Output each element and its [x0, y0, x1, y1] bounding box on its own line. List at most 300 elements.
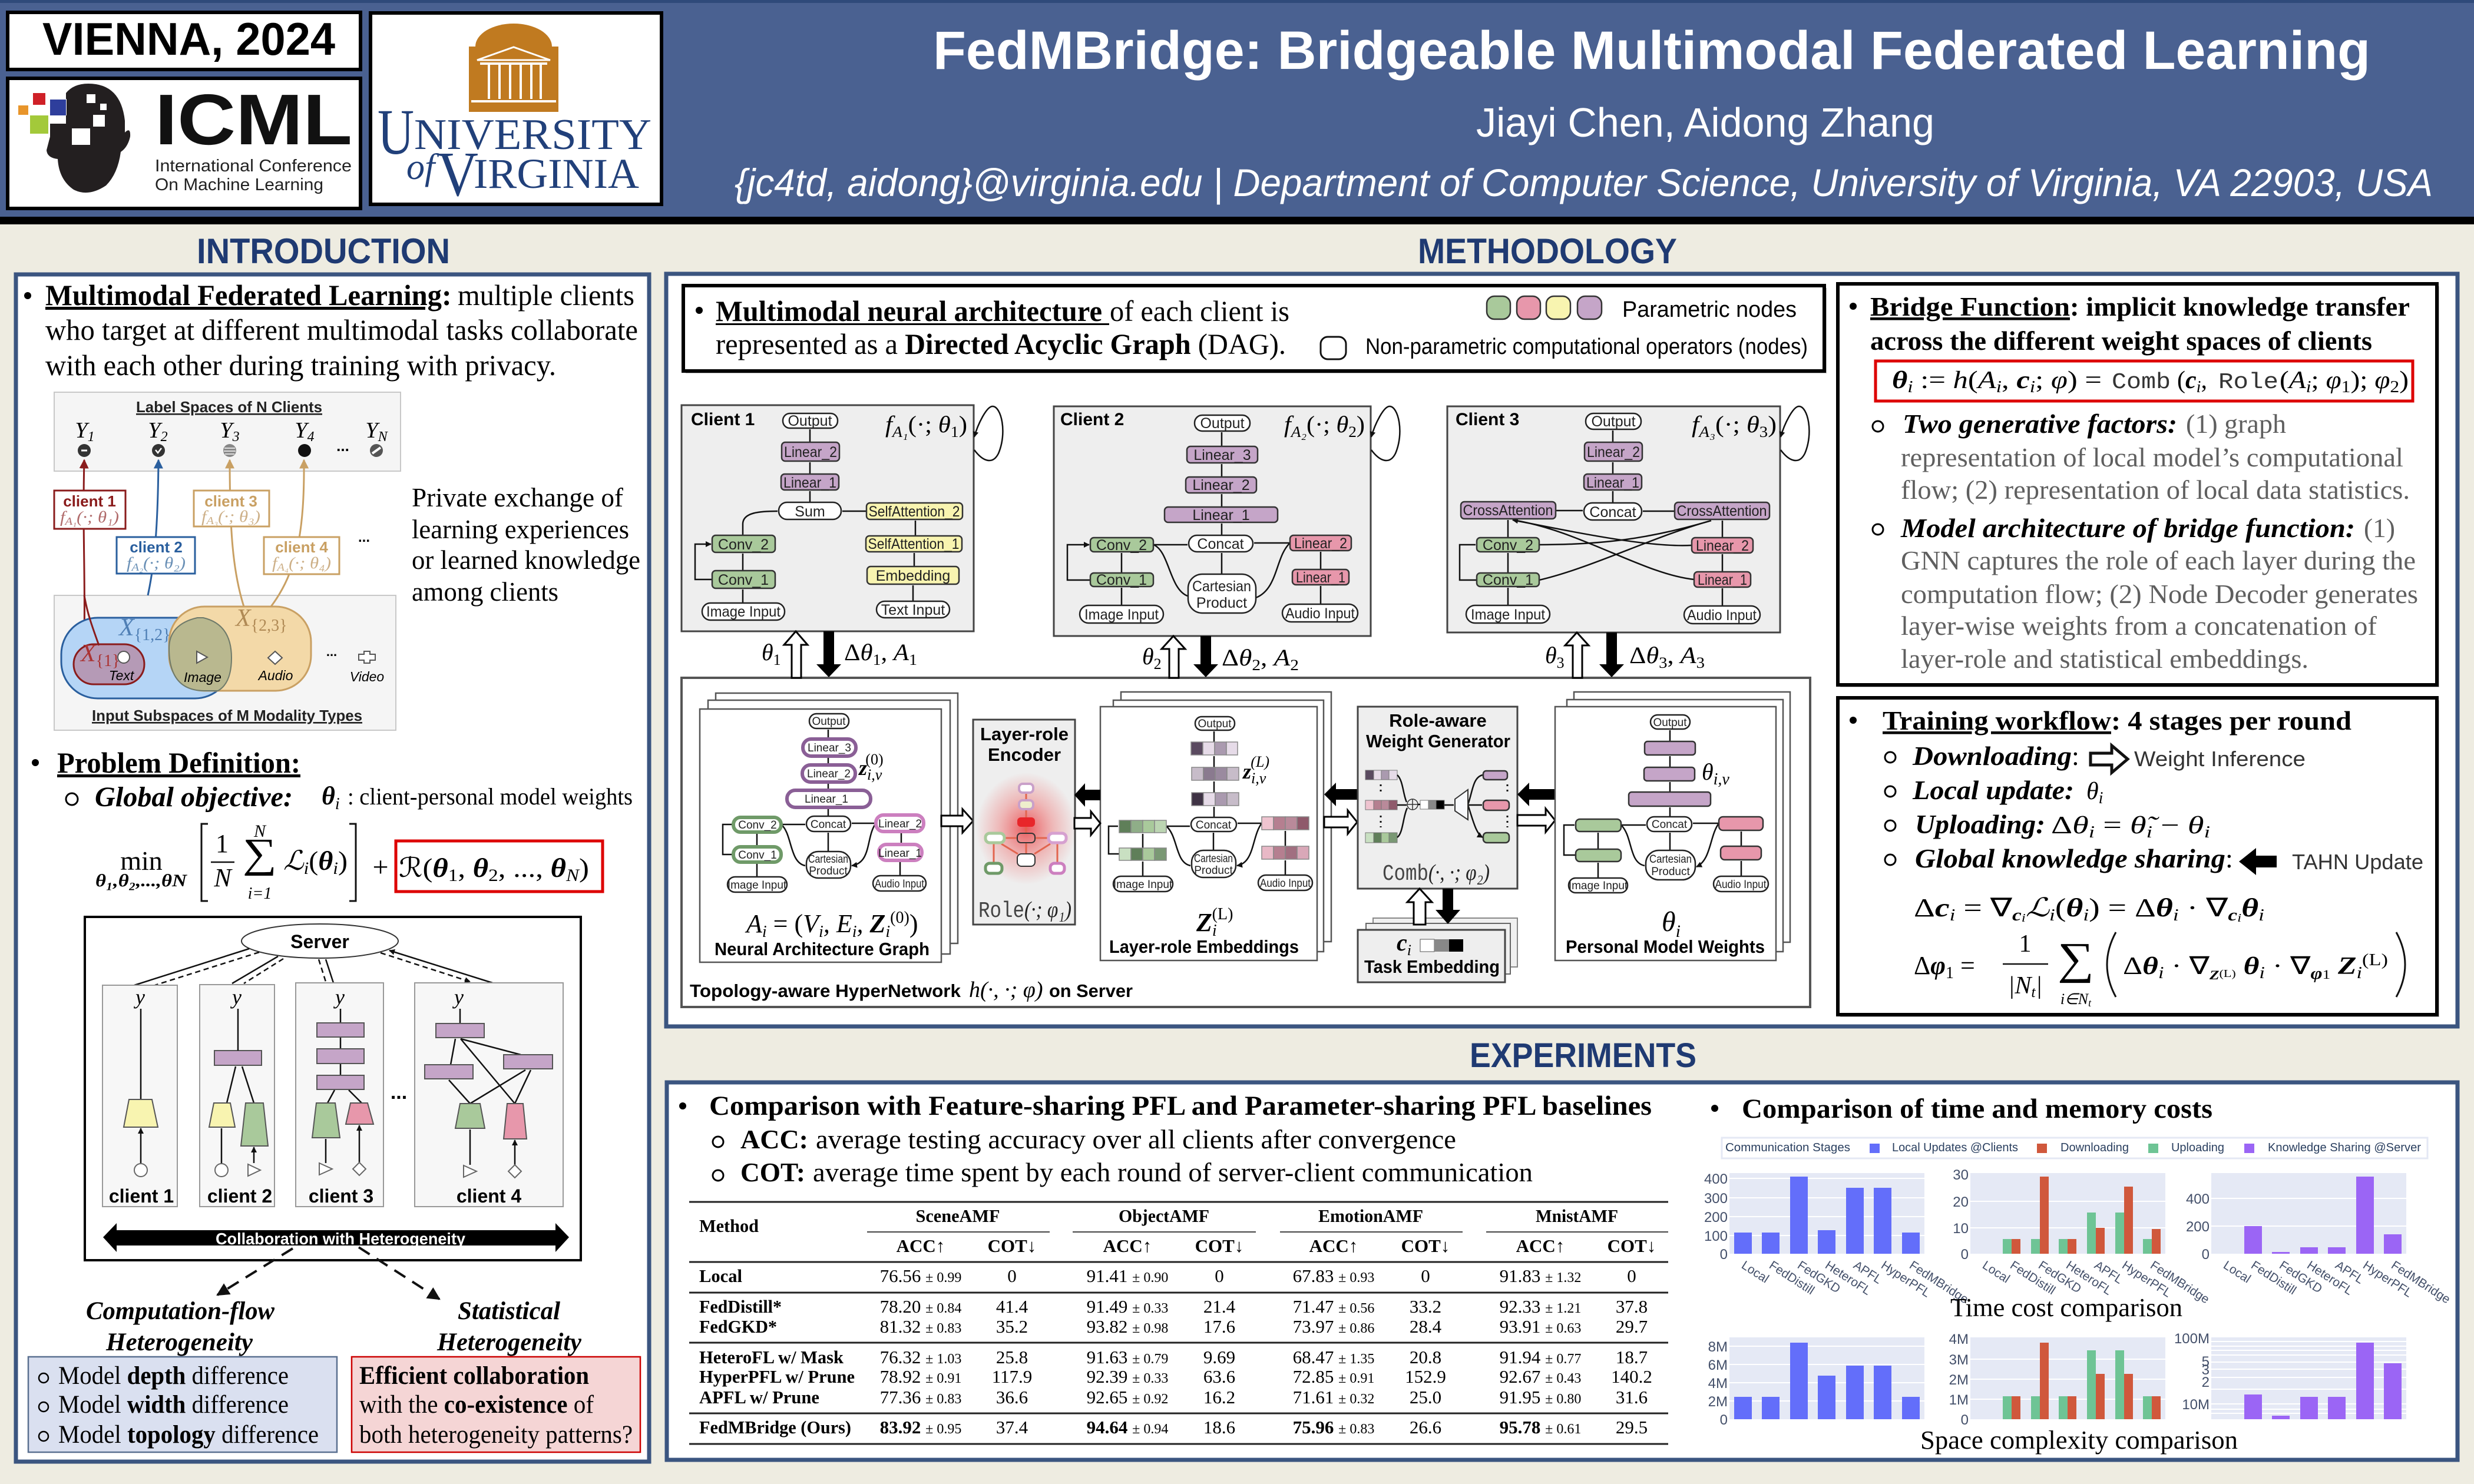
- formula: global objective: i=1: [248, 885, 272, 903]
- chart: space, knowledge sharing: [2174, 1331, 2406, 1419]
- chart: space, uploading and downloading: [1949, 1331, 2165, 1428]
- stage: local update: [1885, 775, 2103, 807]
- arrows: client 2 to hypernetwork: θ: [1142, 643, 1154, 670]
- panel: methodology: [666, 274, 2458, 1026]
- formula: bridge function: i: [2197, 378, 2201, 396]
- text: heterogeneity types: Heterogeneity: [436, 1329, 582, 1356]
- text: problem definition: i: [335, 795, 340, 813]
- stack: neural architecture graph: ,: [856, 909, 869, 938]
- stack: layer-role embeddings: (L): [1251, 753, 1269, 770]
- stack: layer-role embeddings: i: [1212, 922, 1217, 940]
- row: feddistill: 41.4: [996, 1296, 1028, 1317]
- diagram: client 3: 3: [1759, 423, 1768, 440]
- stack: personal model weights: i: [1676, 922, 1681, 941]
- diagram: client 3: θ: [1746, 411, 1758, 438]
- panel: layer-role encoder: [973, 720, 1076, 925]
- diagram: client 2: Client 2: [1060, 410, 1124, 429]
- row: local: 67.83 ± 0.93: [1293, 1266, 1374, 1286]
- text: baselines comparison: average time spent by each round of server-client communication: [813, 1158, 1533, 1187]
- chart: time, knowledge sharing: HyperPFL: [2360, 1258, 2415, 1300]
- text: private exchange: [412, 482, 640, 607]
- stage: uploading: i: [2089, 823, 2095, 842]
- diagram: label spaces and input subspaces: A₂: [131, 561, 143, 573]
- box: research question: with the co-existence of: [359, 1391, 594, 1419]
- diagram: label spaces and input subspaces: Audio: [257, 668, 293, 683]
- client 4: client 4: [457, 1185, 521, 1207]
- stack: personal model weights: Personal Model Weights: [1566, 936, 1765, 957]
- diagram: label spaces and input subspaces: f: [60, 508, 65, 526]
- arrow: collaboration with heterogeneity: [103, 1223, 569, 1252]
- diagram: client 3: Conv_2: [1483, 537, 1533, 554]
- text: baselines comparison: COT:: [740, 1158, 805, 1187]
- row: local: 0: [1215, 1266, 1224, 1286]
- diagram: client 3: Output: [1591, 413, 1636, 430]
- heading: methodology: METHODOLOGY: [1418, 231, 1677, 271]
- formula: bridge function: 1: [2341, 378, 2350, 396]
- diagram: label spaces and input subspaces: {1}: [96, 652, 120, 670]
- stage: global knowledge sharing: :: [2225, 843, 2233, 873]
- row: feddistill: 71.47 ± 0.56: [1293, 1296, 1374, 1317]
- formula: global objective: i: [304, 859, 309, 878]
- table: results: ObjectAMF: [1119, 1205, 1209, 1226]
- logo: University of Virginia: of: [406, 147, 439, 187]
- diagram: client 1: Sum: [795, 504, 825, 520]
- diagram: client 1: A₁: [891, 423, 908, 440]
- diagram: client 1: Linear_1: [783, 475, 836, 491]
- diagram: client 1: Image Input: [706, 604, 780, 620]
- formula: encoder gradient: i: [2259, 964, 2265, 982]
- stack: personal model weights: θ: [1702, 758, 1714, 785]
- arrow: embeddings to encoder: [1074, 783, 1100, 807]
- arrows: client 2 to hypernetwork: A: [1272, 644, 1291, 671]
- formula: encoder gradient: i: [2158, 964, 2164, 982]
- stack: neural architecture graph: Linear_2: [807, 768, 851, 780]
- stack: task embedding: i: [1407, 942, 1411, 959]
- text: private exchange: among clients: [412, 577, 558, 607]
- diagram: client 2: θ: [1336, 411, 1348, 438]
- box: neural architecture definition: Multimodal neural architecture: [716, 294, 1102, 327]
- row: local: 91.83 ± 1.32: [1500, 1266, 1581, 1286]
- diagram: label spaces and input subspaces: {2,3}: [251, 617, 287, 635]
- legend: node types: Parametric nodes: [1622, 297, 1797, 322]
- row: hyperpfl: 72.85 ± 0.91: [1293, 1366, 1374, 1387]
- arrows: client 1 to hypernetwork: A: [892, 639, 909, 665]
- row: apfl: 71.61 ± 0.32: [1293, 1387, 1374, 1407]
- formula: bridge function: Comb: [2112, 370, 2171, 395]
- legend: communication stages: Downloading: [2060, 1141, 2129, 1154]
- chart: time, uploading and downloading: 10: [1953, 1221, 1969, 1237]
- formula: bridge function: i: [2030, 378, 2035, 396]
- diagram: server and client architectures: [85, 917, 581, 1260]
- row: fedgkd: 81.32 ± 0.83: [880, 1316, 961, 1337]
- diagram: client 3: CrossAttention: [1463, 502, 1553, 519]
- stack: layer-role embeddings: i,v: [1251, 770, 1266, 787]
- diagram: client 3: f: [1692, 411, 1698, 438]
- arrows: client 2 to hypernetwork: 2: [1252, 657, 1261, 674]
- formula: encoder gradient: 1: [2323, 967, 2330, 982]
- formula: encoder gradient: t: [2088, 997, 2092, 1009]
- diagram: client 2: A₂: [1290, 423, 1307, 440]
- stage: local update: i: [2099, 789, 2103, 807]
- text: model architecture of bridge function: GNN captures the role of each layer during the: [1901, 545, 2416, 575]
- formula: global objective: θ: [551, 853, 566, 883]
- chart: space, knowledge sharing: 10M: [2182, 1397, 2210, 1413]
- row: fedmbridge: [880, 1417, 1648, 1437]
- formula: global objective: [95, 822, 603, 903]
- formula: task embedding gradient: i: [2083, 906, 2089, 925]
- formula: bridge function: ;: [2311, 367, 2326, 394]
- stack: personal model weights: Concat: [1652, 819, 1688, 831]
- stack: personal model weights: θ: [1662, 906, 1676, 938]
- formula: task embedding gradient: i: [2049, 906, 2055, 925]
- stack: layer-role embeddings: Image Input: [1113, 879, 1173, 891]
- formula: global objective: 2: [488, 866, 498, 885]
- stack: neural architecture graph: Audio Input: [875, 878, 925, 890]
- arrows: client 1 to hypernetwork: Δθ: [844, 639, 872, 665]
- arrow: to statistical heterogeneity: [359, 1247, 439, 1299]
- diagram: client 3: [1447, 406, 1809, 632]
- legend: node types: Non-parametric computational operators (nodes): [1365, 334, 1808, 359]
- stack: neural architecture graph: A: [746, 909, 762, 938]
- row: apfl: 25.0: [1410, 1387, 1441, 1407]
- formula: encoder gradient: · ∇: [2164, 953, 2210, 980]
- legend: communication stages: [1722, 1138, 2427, 1158]
- chart: time, local updates: 200: [1704, 1210, 1728, 1225]
- text: multimodal federated learning: Multimodal Federated Learning: [45, 279, 442, 312]
- chart: time, knowledge sharing: 0: [2202, 1247, 2210, 1263]
- row: local: 0: [1421, 1266, 1430, 1286]
- diagram: client 3: Linear_2: [1696, 538, 1749, 554]
- diagram: client 3: Image Input: [1471, 607, 1545, 623]
- formula: bridge function: i: [1907, 378, 1913, 396]
- row: heterofl: 9.69: [1203, 1347, 1235, 1367]
- chart: time, knowledge sharing: APFL: [2333, 1258, 2366, 1287]
- row: local: 76.56 ± 0.99: [880, 1266, 961, 1286]
- stack: layer-role embeddings: (L): [1212, 905, 1233, 923]
- stack: neural architecture graph: Product: [809, 865, 848, 877]
- formula: bridge function: ,: [2201, 367, 2207, 394]
- chart: time, knowledge sharing: HeteroFL: [2304, 1258, 2355, 1298]
- diagram: client 3: CrossAttention: [1676, 503, 1767, 519]
- diagram: client 1: f: [885, 411, 892, 438]
- authors: Jiayi Chen, Aidong Zhang: [1476, 100, 1934, 145]
- table: results: EmotionAMF: [1318, 1205, 1423, 1226]
- legend: communication stages: Communication Stages: [1725, 1141, 1850, 1154]
- diagram: label spaces and input subspaces: (·; θ₃): [218, 508, 260, 525]
- stack: neural architecture graph: (0): [890, 909, 909, 927]
- arrows: client 2 to hypernetwork: 2: [1154, 655, 1162, 673]
- formula: global objective: +: [372, 852, 389, 883]
- diagram: client 1: SelfAttention_2: [868, 504, 960, 520]
- formula: encoder gradient: i: [2357, 964, 2362, 982]
- chart: time, uploading and downloading: APFL: [2092, 1258, 2125, 1287]
- text: model architecture of bridge function: layer-wise weights from a concatenation of: [1901, 611, 2377, 641]
- diagram: client 3: Concat: [1589, 504, 1636, 521]
- formula: encoder gradient: φ: [2310, 965, 2323, 983]
- formula: task embedding gradient: Δc: [1914, 893, 1946, 922]
- diagram: label spaces and input subspaces: (·; θ₄): [289, 554, 331, 572]
- arrows: client 2 to hypernetwork: Δθ: [1222, 644, 1251, 671]
- formula: global objective: ℒ: [283, 846, 303, 876]
- row: fedmbridge: 83.92 ± 0.95: [880, 1417, 961, 1437]
- diagram: label spaces and input subspaces: Y: [75, 418, 88, 443]
- text: multimodal federated learning: :: [442, 279, 452, 312]
- formula: task embedding gradient: θ: [2241, 893, 2258, 922]
- table: results: [689, 1202, 1668, 1444]
- table: results: FedGKD*: [699, 1316, 777, 1337]
- row: fedmbridge: 37.4: [996, 1417, 1028, 1437]
- formula: task embedding gradient: ) = Δ: [2089, 893, 2156, 922]
- panel: layer-role encoder: Encoder: [988, 744, 1061, 765]
- logo: ICML: On Machine Learning: [155, 175, 323, 194]
- client 2: [200, 985, 274, 1207]
- text: two generative factors: [1873, 409, 2410, 505]
- diagram: client 2: Linear_1: [1296, 569, 1345, 586]
- row: fedgkd: 35.2: [996, 1316, 1028, 1337]
- row: fedmbridge: 18.6: [1203, 1417, 1235, 1437]
- box: neural architecture definition: of each client is: [1110, 294, 1289, 327]
- legend: communication stages: Knowledge Sharing @Server: [2268, 1141, 2421, 1154]
- chart: space, knowledge sharing: 100M: [2174, 1331, 2210, 1347]
- stage: uploading: θ̃: [2130, 812, 2159, 839]
- row: fedgkd: [880, 1316, 1648, 1337]
- chart: time, uploading and downloading: FedDistill: [2007, 1258, 2058, 1297]
- table: results: FedMBridge (Ours): [699, 1417, 851, 1437]
- arrows: client 3 to hypernetwork: 3: [1696, 654, 1705, 671]
- text: private exchange: or learned knowledge: [412, 545, 640, 575]
- diagram: label spaces and input subspaces: ...: [358, 529, 370, 545]
- table: results: COT↓: [988, 1235, 1036, 1256]
- row: fedmbridge: 29.5: [1616, 1417, 1648, 1437]
- stack: neural architecture graph: z: [859, 756, 867, 780]
- stack: personal model weights: i,v: [1714, 770, 1729, 789]
- chart: space, uploading and downloading: 3M: [1949, 1352, 1969, 1368]
- text: problem definition: [32, 746, 633, 813]
- stack: personal model weights: [1555, 692, 1790, 960]
- row: hyperpfl: 152.9: [1405, 1366, 1446, 1387]
- diagram: client 2: Linear_2: [1294, 535, 1347, 552]
- table: results: ACC↑: [1309, 1235, 1358, 1256]
- diagram: label spaces and input subspaces: ...: [336, 437, 349, 455]
- box: neural architecture definition: [683, 286, 1827, 373]
- chart: time, local updates: HeteroFL: [1823, 1258, 1873, 1298]
- label: hypernetwork on server: h(·, ·; φ): [969, 978, 1043, 1002]
- diagram: client 1: Linear_2: [784, 444, 837, 461]
- chart: time, uploading and downloading: FedGKD: [2036, 1258, 2083, 1296]
- row: hyperpfl: 92.67 ± 0.43: [1500, 1366, 1581, 1387]
- stage: downloading: [1885, 741, 2306, 773]
- formula: task embedding gradient: ℒ: [2026, 893, 2050, 922]
- row: fedmbridge: 26.6: [1410, 1417, 1441, 1437]
- stack: neural architecture graph: i: [852, 923, 856, 941]
- arrow: generator to embeddings: [1324, 783, 1358, 806]
- row: feddistill: 21.4: [1203, 1296, 1236, 1317]
- row: heterofl: 68.47 ± 1.35: [1293, 1347, 1374, 1367]
- row: feddistill: 91.49 ± 0.33: [1087, 1296, 1168, 1317]
- row: heterofl: 91.94 ± 0.77: [1500, 1347, 1581, 1367]
- diagram: label spaces and input subspaces: 3: [232, 429, 240, 445]
- formula: task embedding gradient: c: [2228, 906, 2238, 925]
- table: results: ACC↑: [1516, 1235, 1565, 1256]
- row: hyperpfl: 78.92 ± 0.91: [880, 1366, 961, 1387]
- stage: downloading: :: [2072, 741, 2079, 771]
- formula: bridge function: ;: [2035, 367, 2051, 394]
- diagram: client 1: Embedding: [876, 568, 950, 584]
- caption: space complexity: Space complexity comparison: [1920, 1426, 2238, 1455]
- table: results: COT↓: [1401, 1235, 1450, 1256]
- text: two generative factors: flow; (2) representation of local data statistics.: [1901, 475, 2410, 505]
- text: multimodal federated learning: who target at different multimodal tasks collaborate: [45, 313, 638, 346]
- diagram: client 3: Linear_1: [1698, 572, 1747, 588]
- diagram: client 3: A₃: [1698, 423, 1715, 440]
- diagram: client 2: ): [1357, 411, 1365, 438]
- panel: introduction: [16, 274, 649, 1462]
- diagram: client 1: SelfAttention_1: [868, 536, 959, 552]
- formula: global objective: (: [309, 846, 318, 876]
- diagram: client 2: Concat: [1197, 536, 1244, 552]
- chart: space, local updates: 8M: [1708, 1339, 1728, 1355]
- text: baselines comparison: Comparison with Feature-sharing PFL and Parameter-sharing PFL baselines: [709, 1091, 1652, 1121]
- formula: encoder gradient: Z: [2330, 953, 2357, 980]
- diagram: client 3: Audio Input: [1687, 607, 1757, 624]
- diagram: client 2: Product: [1196, 595, 1247, 611]
- diagram: client 2: Linear_3: [1193, 447, 1251, 463]
- box: training workflow: [1838, 698, 2439, 1017]
- row: fedmbridge: 94.64 ± 0.94: [1087, 1417, 1168, 1437]
- arrows: client 1 to hypernetwork: [762, 631, 917, 678]
- stack: layer-role embeddings: Z: [1196, 908, 1212, 937]
- box: research question: [352, 1357, 640, 1452]
- chart: space, local updates: 4M: [1708, 1376, 1728, 1392]
- diagram: client 2: Image Input: [1084, 607, 1159, 623]
- diagram: client 2: Conv_1: [1096, 572, 1147, 588]
- diagram: client 1: θ: [938, 411, 950, 438]
- table: results: HyperPFL w/ Prune: [699, 1366, 855, 1387]
- formula: encoder gradient: · ∇: [2265, 953, 2311, 980]
- table: results: HeteroFL w/ Mask: [699, 1347, 844, 1367]
- chart: time, local updates: Local: [1739, 1258, 1771, 1286]
- diagram: client 3: Conv_1: [1483, 572, 1533, 588]
- stage: uploading: Uploading:: [1915, 809, 2045, 839]
- logo: ICML: ICML: [155, 80, 352, 160]
- row: fedgkd: 93.82 ± 0.98: [1087, 1316, 1168, 1337]
- chart: time, uploading and downloading: 20: [1953, 1194, 1969, 1210]
- row: hyperpfl: 140.2: [1611, 1366, 1652, 1387]
- formula: bridge function: φ) =: [2051, 367, 2096, 394]
- diagram: label spaces and input subspaces: f: [127, 554, 131, 572]
- box: model differences: Model topology difference: [58, 1421, 319, 1449]
- chart: time, uploading and downloading: FedMBridge: [2148, 1258, 2212, 1306]
- server: Server: [290, 931, 349, 952]
- stack: personal model weights: Audio Input: [1715, 879, 1767, 891]
- diagram: client 1: [682, 405, 1003, 631]
- arrows: client 3 to hypernetwork: ,: [1668, 642, 1681, 668]
- formula: encoder gradient: 1: [1946, 964, 1954, 982]
- panel: layer-role encoder: Layer-role: [980, 724, 1069, 744]
- panel: role-aware weight generator: [1358, 707, 1517, 889]
- chart: time, knowledge sharing: Local: [2221, 1258, 2253, 1286]
- row: heterofl: 18.7: [1616, 1347, 1648, 1367]
- arrow: weights to generator: [1517, 783, 1555, 806]
- diagram: client 3: Client 3: [1456, 410, 1519, 429]
- stage: uploading: =: [2095, 812, 2130, 839]
- arrows: client 3 to hypernetwork: [1545, 632, 1705, 678]
- label: hypernetwork on server: [690, 978, 1133, 1002]
- chart: time, local updates: 0: [1720, 1247, 1728, 1263]
- stack: layer-role embeddings: Cartesian: [1194, 853, 1233, 865]
- formula: global objective: i: [333, 859, 338, 878]
- text: model architecture of bridge function: [1873, 513, 2418, 674]
- formula: global objective: , ...,: [498, 853, 551, 883]
- diagram: client 1: Conv_2: [718, 536, 769, 553]
- formula: task embedding gradient: θ: [2156, 893, 2173, 922]
- stage: uploading: i: [2204, 823, 2210, 842]
- text: model architecture of bridge function: Model architecture of bridge function:: [1900, 513, 2355, 543]
- formula: encoder gradient: (L): [2220, 968, 2236, 980]
- row: apfl: 16.2: [1203, 1387, 1235, 1407]
- text: model architecture of bridge function: (1): [2364, 513, 2395, 543]
- formula: global objective: N: [213, 863, 233, 892]
- stack: layer-role embeddings: Layer-role Embeddings: [1109, 936, 1299, 957]
- stack: layer-role embeddings: Audio Input: [1260, 877, 1311, 890]
- stack: neural architecture graph: Cartesian: [808, 853, 848, 866]
- row: hyperpfl: 117.9: [992, 1366, 1032, 1387]
- formula: bridge function: (c: [2177, 367, 2197, 394]
- box: bridge function: : implicit knowledge transfer: [2070, 292, 2410, 322]
- diagram: client 2: Linear_2: [1192, 477, 1250, 493]
- panel: role-aware weight generator: (·, ·; φ₂): [1428, 860, 1490, 885]
- box: bridge function: across the different weight spaces of clients: [1870, 326, 2372, 356]
- panel: layer-role encoder: Role: [978, 899, 1024, 924]
- formula: task embedding gradient: c: [2012, 906, 2022, 925]
- legend: node types: [1321, 296, 1808, 359]
- panel: experiments: [667, 1082, 2458, 1460]
- table: results: Method: [699, 1215, 759, 1236]
- stack: neural architecture graph: i,v: [867, 766, 882, 783]
- row: fedgkd: 73.97 ± 0.86: [1293, 1316, 1374, 1337]
- logo: ICML: International Conference: [155, 157, 352, 175]
- chart: time, local updates: 100: [1704, 1228, 1728, 1244]
- row: heterofl: [880, 1347, 1648, 1367]
- client 3: client 3: [309, 1185, 373, 1207]
- arrows: client 1 to hypernetwork: 1: [873, 651, 881, 668]
- text: multimodal federated learning: with each other during training with privacy.: [45, 349, 556, 382]
- diagram: label spaces and input subspaces: X: [119, 614, 134, 641]
- chart: space, local updates: 0: [1720, 1412, 1728, 1428]
- logo: University of Virginia: V: [437, 140, 478, 210]
- text: baselines comparison: [679, 1091, 1652, 1187]
- row: hyperpfl: 92.39 ± 0.33: [1087, 1366, 1168, 1387]
- row: fedgkd: 93.91 ± 0.63: [1500, 1316, 1581, 1337]
- stack: layer-role embeddings: Product: [1194, 864, 1233, 877]
- row: fedgkd: 28.4: [1410, 1316, 1442, 1337]
- text: private exchange: Private exchange of: [412, 482, 624, 512]
- stack: neural architecture graph: Output: [812, 716, 846, 728]
- chart: space, local updates: 2M: [1708, 1394, 1728, 1410]
- formula: global objective: 1: [216, 829, 229, 858]
- arrows: client 1 to hypernetwork: θ: [762, 639, 773, 665]
- stage: uploading: [1885, 809, 2210, 842]
- diagram: client 2: [1054, 406, 1400, 636]
- box: model differences: [28, 1357, 337, 1452]
- row: heterofl: 20.8: [1410, 1347, 1441, 1367]
- formula: global objective: ): [338, 846, 348, 876]
- formula: task embedding gradient: i: [2237, 912, 2241, 925]
- diagram: label spaces and input subspaces: A₄: [276, 561, 289, 573]
- diagram: client 3: ): [1768, 411, 1777, 438]
- row: feddistill: 92.33 ± 1.21: [1500, 1296, 1581, 1317]
- diagram: label spaces and input subspaces: (·; θ₂): [143, 554, 186, 572]
